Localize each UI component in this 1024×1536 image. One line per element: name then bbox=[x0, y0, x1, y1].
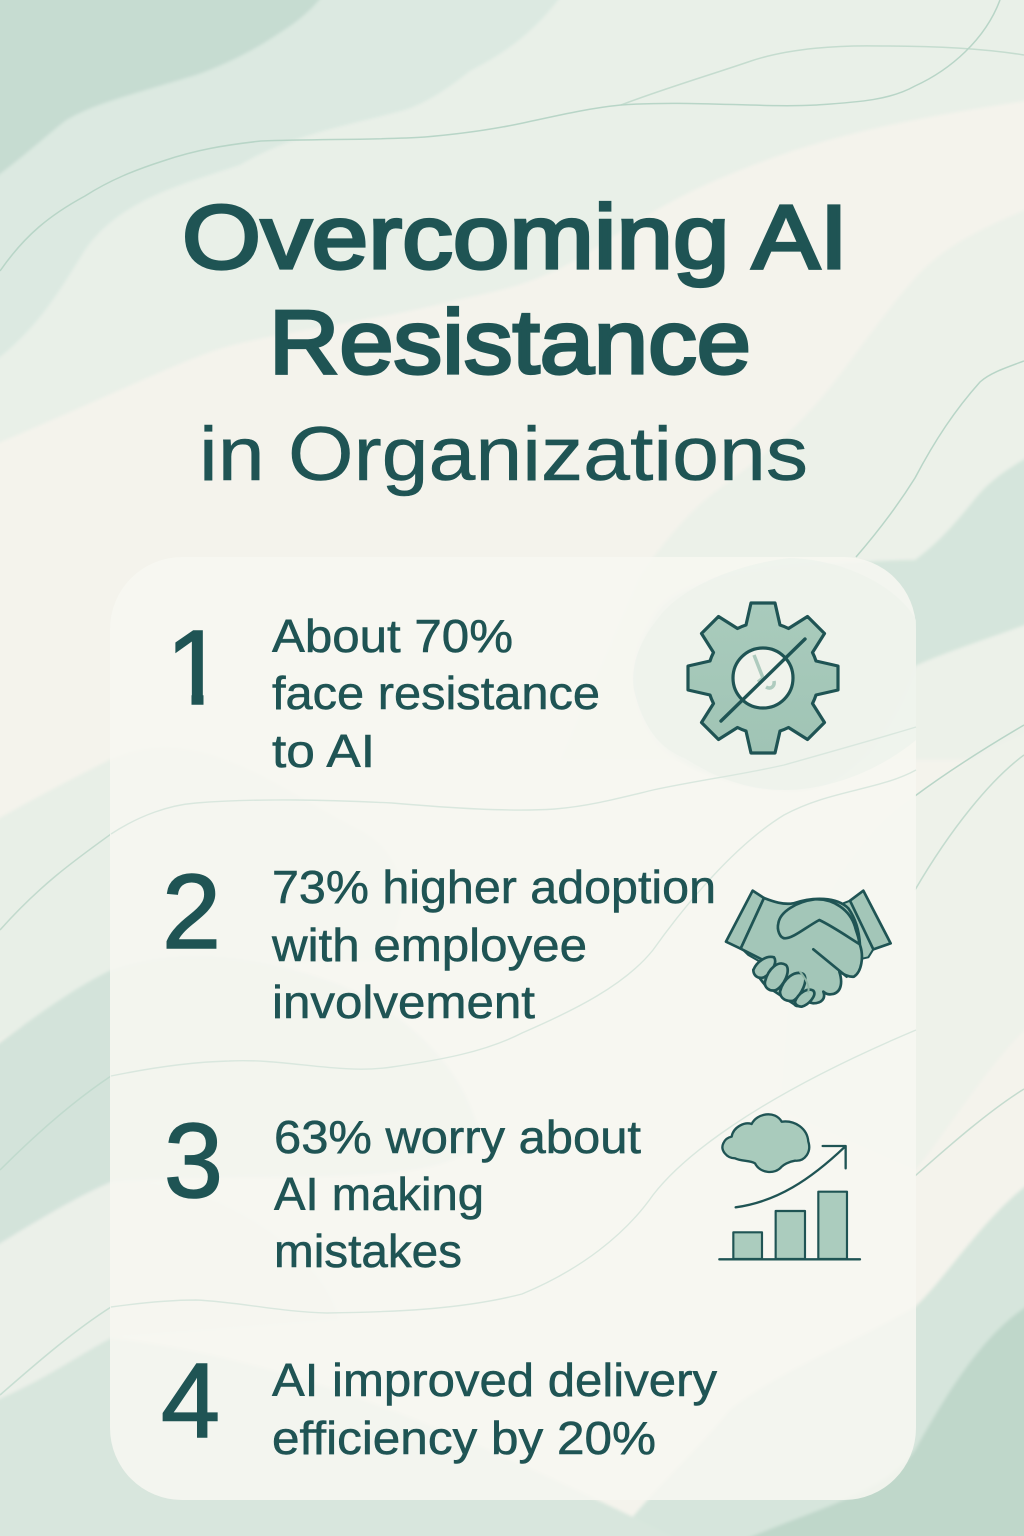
bottom left layer bbox=[0, 1338, 720, 1536]
left dark band bbox=[0, 956, 480, 1262]
icon: handshake bbox=[726, 891, 891, 1007]
bottom right dark layer bbox=[700, 1290, 1024, 1536]
trend arrow bbox=[736, 1146, 846, 1207]
icon: crossed-out gear bbox=[688, 603, 838, 753]
text: 63% worry about bbox=[274, 1111, 641, 1277]
right pale layer bbox=[560, 195, 1024, 760]
icon: cloud and rising bars bbox=[719, 1114, 860, 1259]
top light layer bbox=[0, 0, 1024, 455]
right mid layer bbox=[780, 720, 1024, 1170]
title line 2: Resistance bbox=[269, 293, 751, 393]
bars bbox=[733, 1192, 847, 1259]
panel: statistics list bbox=[110, 188, 916, 1500]
item 1 bbox=[166, 603, 838, 777]
title line 1: Overcoming AI bbox=[182, 188, 848, 288]
text: about 70% bbox=[272, 610, 600, 777]
item 3 bbox=[164, 1102, 860, 1277]
subtitle: in Organizations bbox=[199, 412, 808, 497]
text: about 70%: About 70% bbox=[272, 610, 513, 662]
text: 73% higher adoption: involvement bbox=[272, 976, 535, 1028]
text: about 70%: face resistance bbox=[272, 667, 600, 719]
right band behind gear bbox=[636, 440, 1024, 790]
number 1: 1 bbox=[166, 609, 225, 727]
cloud bbox=[722, 1114, 809, 1172]
text: AI improved delivery: efficiency by 20% bbox=[272, 1412, 656, 1464]
top dark layer bbox=[0, 0, 340, 195]
lower right layer bbox=[600, 1165, 1024, 1536]
item 2 bbox=[162, 853, 891, 1028]
title bbox=[182, 188, 848, 497]
number 2: 2 bbox=[162, 853, 221, 971]
number 4: 4 bbox=[161, 1342, 220, 1460]
text: AI improved delivery bbox=[272, 1354, 717, 1464]
number 3: 3 bbox=[164, 1102, 223, 1220]
text: AI improved delivery: AI improved delivery bbox=[272, 1354, 717, 1406]
text: 63% worry about: mistakes bbox=[274, 1225, 462, 1277]
text: 73% higher adoption bbox=[271, 861, 716, 1028]
gear backdrop blob bbox=[633, 558, 916, 790]
left pale layer bbox=[0, 748, 402, 1060]
text: 73% higher adoption: 73% higher adoption bbox=[272, 861, 716, 913]
text: about 70%: to AI bbox=[272, 725, 375, 777]
lower left pale layer bbox=[0, 1181, 340, 1410]
text: 73% higher adoption: with employee bbox=[271, 919, 587, 971]
item 4 bbox=[161, 1342, 717, 1464]
text: 63% worry about: AI making bbox=[274, 1168, 484, 1220]
top mid layer bbox=[0, 0, 580, 375]
text: 63% worry about: 63% worry about bbox=[274, 1111, 641, 1163]
